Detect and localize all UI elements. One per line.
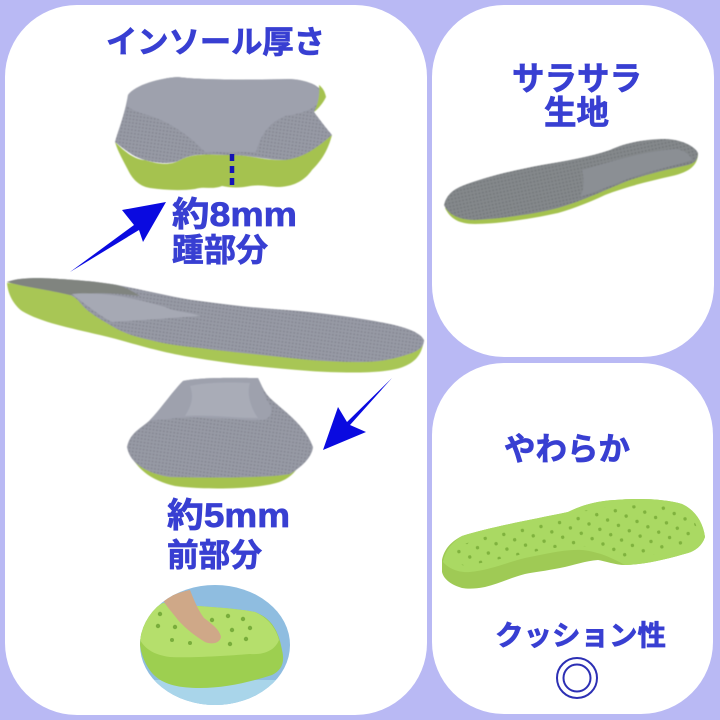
panel: insole thickness [5,5,427,715]
panel: soft cushioning [432,363,713,714]
finger [163,590,221,643]
label: cushioning: クッション性 [495,620,666,651]
arrow: to forefoot sample [323,378,392,450]
heading: soft: やわらか [504,431,630,467]
panel: smooth fabric [432,5,714,357]
label: heel thickness 8mm: 約8mm [172,196,297,234]
heading: fabric: 生地 [544,94,609,131]
photo: finger pressing foam [140,585,290,705]
label: heel part: 踵部分 [172,232,268,268]
label: front part: 前部分 [167,537,262,573]
rating: double circle [557,658,597,698]
forefoot cross-section sample [127,378,313,488]
dashed thickness marker [230,154,234,187]
arrow: to heel sample [70,202,166,272]
heading: insole thickness: インソール厚さ [106,25,325,60]
insole top view, grey fabric [444,139,698,224]
full insole side view [7,278,424,373]
heading: smooth: サラサラ [512,60,642,97]
insole underside, green foam [442,499,705,589]
label: forefoot thickness 5mm: 約5mm [167,497,290,535]
heel cross-section sample [115,77,332,190]
